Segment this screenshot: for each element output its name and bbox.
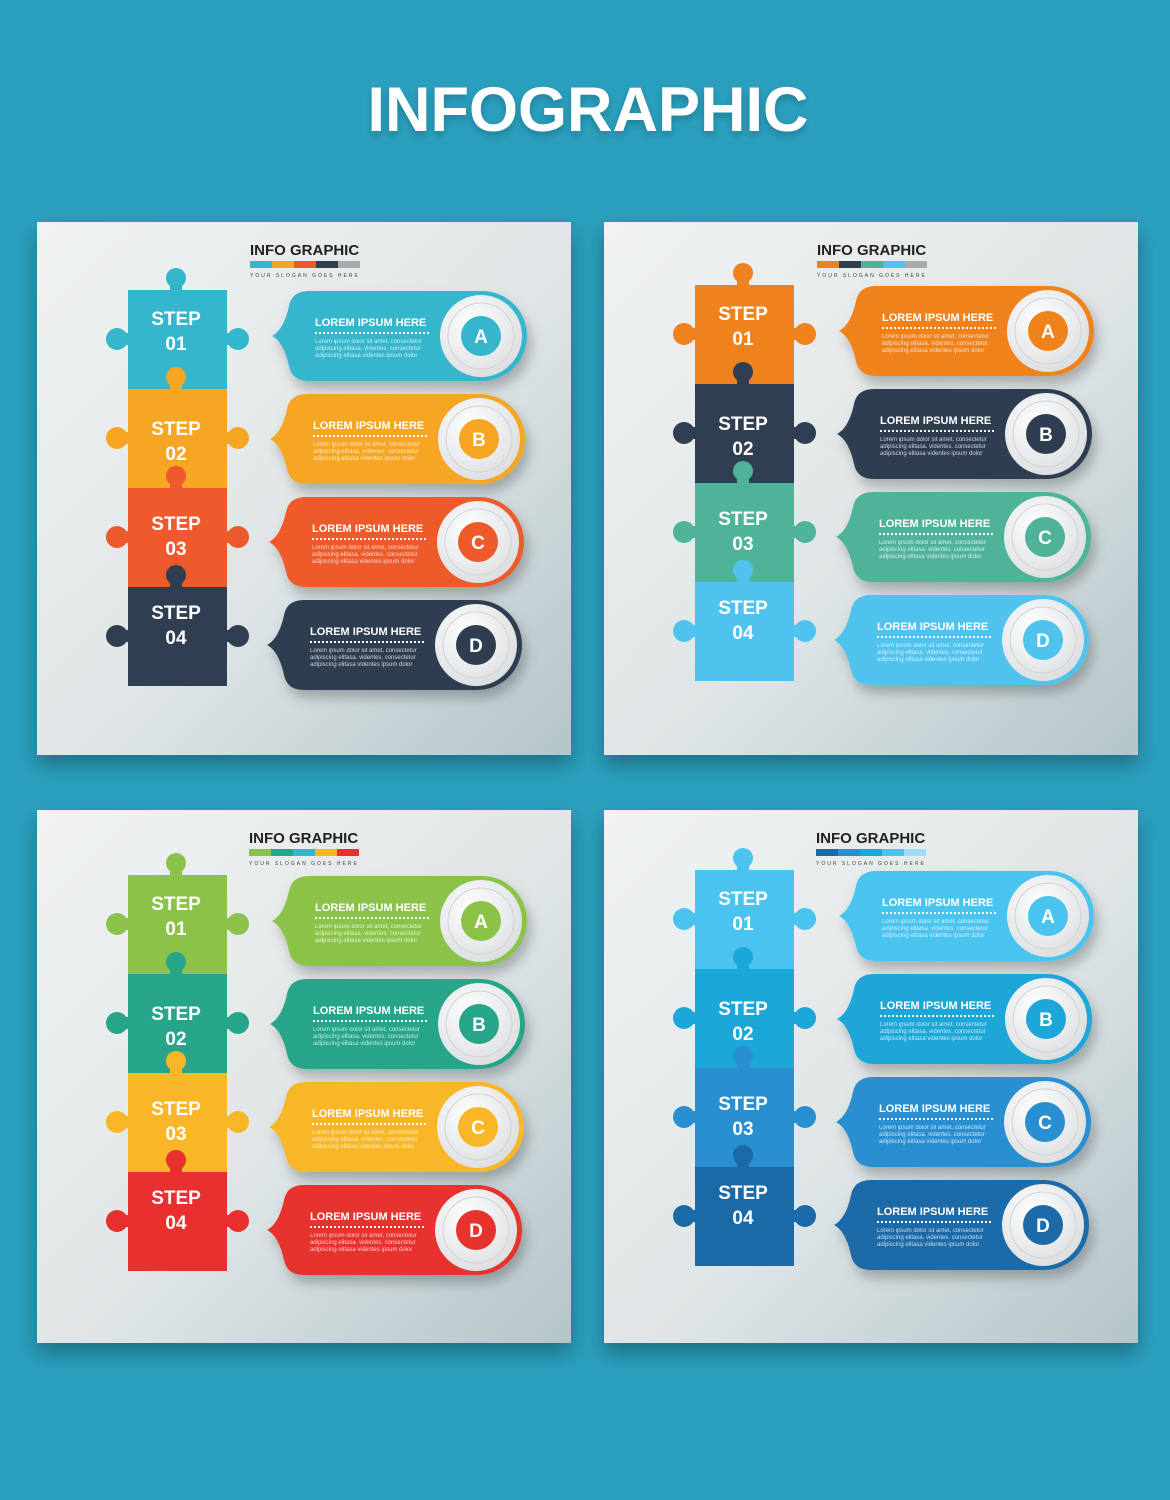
puzzle column: STEP (718, 414, 768, 435)
callout D: LOREM IPSUM HERE (877, 621, 988, 633)
header: INFO GRAPHIC (817, 242, 926, 259)
callout A (272, 291, 527, 381)
header: YOUR SLOGAN GOES HERE (249, 861, 359, 867)
callout B (270, 979, 525, 1069)
callout D: D (1036, 631, 1050, 652)
callout C: C (1038, 1113, 1052, 1134)
callout A: LOREM IPSUM HERE (882, 312, 993, 324)
callout B: Lorem ipsum dolor sit amet, consectetur (313, 1027, 420, 1033)
callout C: adipiscing elitasa videntes ipsum dolor (312, 1144, 414, 1150)
callout C: adipiscing elitasa. videntes. consectetur (879, 547, 985, 553)
callout D: adipiscing elitasa. videntes. consectetur (310, 655, 416, 661)
callout C: adipiscing elitasa. videntes. consectetur (312, 552, 418, 558)
callout D: adipiscing elitasa videntes ipsum dolor (310, 662, 412, 668)
callout D: adipiscing elitasa. videntes. consectetur (877, 650, 983, 656)
puzzle column: STEP (718, 999, 768, 1020)
callout B: adipiscing elitasa. videntes. consectetur (880, 1029, 986, 1035)
puzzle column: 04 (732, 1208, 754, 1229)
puzzle column: STEP (151, 603, 201, 624)
puzzle column: STEP (151, 1188, 201, 1209)
callout D: adipiscing elitasa. videntes. consectetur (310, 1240, 416, 1246)
callout C: Lorem ipsum dolor sit amet, consectetur (312, 1130, 419, 1136)
callout C: Lorem ipsum dolor sit amet, consectetur (879, 540, 986, 546)
callout B: B (472, 430, 486, 451)
callout C: adipiscing elitasa videntes ipsum dolor (879, 554, 981, 560)
puzzle column: 02 (732, 439, 754, 460)
header (816, 830, 926, 867)
puzzle column: 01 (732, 914, 754, 935)
callout D: adipiscing elitasa videntes ipsum dolor (877, 657, 979, 663)
panel: top-right (604, 222, 1138, 755)
callout A: adipiscing elitasa. videntes. consectetur (315, 346, 421, 352)
callout C: adipiscing elitasa videntes ipsum dolor (312, 559, 414, 565)
callout C: adipiscing elitasa. videntes. consectetur (879, 1132, 985, 1138)
callout D: LOREM IPSUM HERE (310, 626, 421, 638)
callout B: LOREM IPSUM HERE (880, 1000, 991, 1012)
callout A: A (474, 912, 488, 933)
puzzle column: 04 (732, 623, 754, 644)
callout B: Lorem ipsum dolor sit amet, consectetur (880, 437, 987, 443)
callout D: Lorem ipsum dolor sit amet, consectetur (877, 1228, 984, 1234)
callout D: D (469, 1221, 483, 1242)
header (249, 830, 359, 867)
puzzle column: 01 (165, 919, 187, 940)
callout D: Lorem ipsum dolor sit amet, consectetur (877, 643, 984, 649)
callout C: C (1038, 528, 1052, 549)
callout C: Lorem ipsum dolor sit amet, consectetur (879, 1125, 986, 1131)
header: YOUR SLOGAN GOES HERE (250, 273, 360, 279)
callout B: LOREM IPSUM HERE (313, 420, 424, 432)
callout B: Lorem ipsum dolor sit amet, consectetur (313, 442, 420, 448)
callout C (269, 1082, 524, 1172)
puzzle column: STEP (151, 1004, 201, 1025)
callout B (837, 974, 1092, 1064)
puzzle column: STEP (718, 1183, 768, 1204)
callout B (837, 389, 1092, 479)
callout D: adipiscing elitasa. videntes. consectetur (877, 1235, 983, 1241)
callout A: LOREM IPSUM HERE (315, 317, 426, 329)
puzzle column: 02 (165, 1029, 187, 1050)
callout A: adipiscing elitasa videntes ipsum dolor (315, 938, 417, 944)
puzzle column: 03 (165, 1124, 187, 1145)
callout A: Lorem ipsum dolor sit amet, consectetur (315, 924, 422, 930)
callout D: Lorem ipsum dolor sit amet, consectetur (310, 648, 417, 654)
callout B (270, 394, 525, 484)
header: YOUR SLOGAN GOES HERE (816, 861, 926, 867)
callout C (836, 492, 1091, 582)
puzzle column (673, 263, 816, 681)
callout A: A (1041, 322, 1055, 343)
puzzle column: 02 (732, 1024, 754, 1045)
callout D (267, 1185, 522, 1275)
callout D (267, 600, 522, 690)
header (250, 242, 360, 279)
puzzle column: STEP (718, 304, 768, 325)
callout D: LOREM IPSUM HERE (310, 1211, 421, 1223)
callout B: B (472, 1015, 486, 1036)
callout B: LOREM IPSUM HERE (313, 1005, 424, 1017)
puzzle column: STEP (718, 1094, 768, 1115)
puzzle column: 01 (732, 329, 754, 350)
callout B: Lorem ipsum dolor sit amet, consectetur (880, 1022, 987, 1028)
callout A: LOREM IPSUM HERE (315, 902, 426, 914)
callout A: adipiscing elitasa. videntes. consectetur (315, 931, 421, 937)
callout D: LOREM IPSUM HERE (877, 1206, 988, 1218)
callout B: adipiscing elitasa. videntes. consectetur (880, 444, 986, 450)
puzzle column: STEP (151, 1099, 201, 1120)
callout C: Lorem ipsum dolor sit amet, consectetur (312, 545, 419, 551)
callout C: C (471, 1118, 485, 1139)
callout C: LOREM IPSUM HERE (879, 518, 990, 530)
header: INFO GRAPHIC (250, 242, 359, 259)
panel: bottom-right (604, 810, 1138, 1343)
callout B: adipiscing elitasa. videntes. consectetur (313, 1034, 419, 1040)
callout D (834, 1180, 1089, 1270)
callout A (839, 871, 1094, 961)
header (817, 242, 927, 279)
header: INFO GRAPHIC (816, 830, 925, 847)
puzzle column: 03 (732, 1119, 754, 1140)
callout C: LOREM IPSUM HERE (879, 1103, 990, 1115)
puzzle column: 04 (165, 628, 187, 649)
puzzle column: STEP (718, 598, 768, 619)
panel: bottom-left (37, 810, 571, 1343)
callout B: B (1039, 1010, 1053, 1031)
callout C (269, 497, 524, 587)
callout A: Lorem ipsum dolor sit amet, consectetur (882, 919, 989, 925)
callout D (834, 595, 1089, 685)
callout B: LOREM IPSUM HERE (880, 415, 991, 427)
callout C (836, 1077, 1091, 1167)
callout A: adipiscing elitasa. videntes. consectetur (882, 926, 988, 932)
callout C: LOREM IPSUM HERE (312, 1108, 423, 1120)
callout D: adipiscing elitasa videntes ipsum dolor (310, 1247, 412, 1253)
callout B: adipiscing elitasa videntes ipsum dolor (880, 451, 982, 457)
callout B: adipiscing elitasa videntes ipsum dolor (313, 456, 415, 462)
callout A (839, 286, 1094, 376)
callout C: LOREM IPSUM HERE (312, 523, 423, 535)
callout D: D (469, 636, 483, 657)
puzzle column: STEP (718, 509, 768, 530)
callout B: adipiscing elitasa. videntes. consectetur (313, 449, 419, 455)
callout C: adipiscing elitasa videntes ipsum dolor (879, 1139, 981, 1145)
puzzle column (106, 853, 249, 1271)
callout A: adipiscing elitasa videntes ipsum dolor (882, 348, 984, 354)
callout B: adipiscing elitasa videntes ipsum dolor (880, 1036, 982, 1042)
puzzle column: STEP (718, 889, 768, 910)
callout D: Lorem ipsum dolor sit amet, consectetur (310, 1233, 417, 1239)
callout A: Lorem ipsum dolor sit amet, consectetur (315, 339, 422, 345)
callout A: A (1041, 907, 1055, 928)
callout B: adipiscing elitasa videntes ipsum dolor (313, 1041, 415, 1047)
title: INFOGRAPHIC (368, 75, 808, 145)
puzzle column: STEP (151, 514, 201, 535)
callout A: LOREM IPSUM HERE (882, 897, 993, 909)
callout C: C (471, 533, 485, 554)
callout A: adipiscing elitasa. videntes. consectetur (882, 341, 988, 347)
callout A: A (474, 327, 488, 348)
puzzle column: STEP (151, 419, 201, 440)
header: INFO GRAPHIC (249, 830, 358, 847)
callout B: B (1039, 425, 1053, 446)
puzzle column: STEP (151, 309, 201, 330)
puzzle column: 01 (165, 334, 187, 355)
puzzle column: 02 (165, 444, 187, 465)
puzzle column: 04 (165, 1213, 187, 1234)
puzzle column: 03 (732, 534, 754, 555)
panel: top-left (37, 222, 571, 755)
callout A: adipiscing elitasa videntes ipsum dolor (315, 353, 417, 359)
puzzle column (106, 268, 249, 686)
callout A: Lorem ipsum dolor sit amet, consectetur (882, 334, 989, 340)
callout A (272, 876, 527, 966)
callout A: adipiscing elitasa videntes ipsum dolor (882, 933, 984, 939)
puzzle column: STEP (151, 894, 201, 915)
puzzle column (673, 848, 816, 1266)
puzzle column: 03 (165, 539, 187, 560)
callout C: adipiscing elitasa. videntes. consectetur (312, 1137, 418, 1143)
header: YOUR SLOGAN GOES HERE (817, 273, 927, 279)
callout D: adipiscing elitasa videntes ipsum dolor (877, 1242, 979, 1248)
callout D: D (1036, 1216, 1050, 1237)
